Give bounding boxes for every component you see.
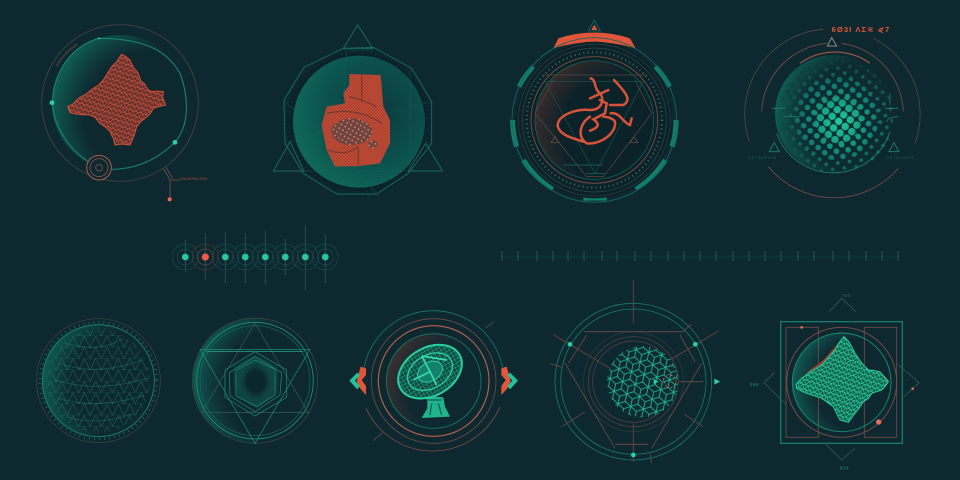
- callout line and dot: [163, 167, 179, 201]
- globe glow: [42, 325, 154, 437]
- panel: row of signal dots: [172, 225, 338, 290]
- left glyph label: ESTSUPLTE: [748, 156, 777, 160]
- wireframe terrain: [68, 54, 166, 145]
- rings: [36, 319, 160, 443]
- small dial: [87, 155, 111, 180]
- panel: rhombus sphere target: [550, 280, 720, 463]
- hexagon core: [233, 355, 278, 408]
- right glyph label: SETSTUEIS: [887, 156, 914, 160]
- triangle lattice: [46, 329, 150, 432]
- outer ring: [42, 25, 198, 181]
- diamond pointers: [764, 298, 919, 460]
- concentric rings: [512, 38, 677, 202]
- glyph header: 6Ø3I ΛΣ⋜ ⋞7: [832, 25, 890, 34]
- red point cluster: [663, 374, 677, 387]
- top triangle marker: [588, 20, 600, 31]
- creature squiggle: [558, 78, 632, 143]
- bracket lines: [550, 280, 719, 463]
- green dots: [182, 254, 329, 260]
- green wireframe terrain: [796, 337, 889, 422]
- triangle markers: [769, 38, 899, 152]
- latitude lines: [55, 338, 147, 421]
- teal inner ring with glow: [52, 35, 188, 171]
- red dot: [202, 253, 209, 261]
- hexagram lines: [200, 323, 310, 443]
- panel: organ sphere in polygon frame: [273, 25, 443, 194]
- right chevrons: [501, 367, 518, 395]
- vertical signal lines: [185, 225, 325, 290]
- rings: [787, 327, 897, 437]
- inner triangles: [535, 75, 652, 177]
- teal markers: [50, 37, 177, 145]
- sigil disc: [193, 319, 317, 443]
- dial rings: [363, 311, 503, 451]
- teal markers: [568, 342, 720, 457]
- rhombus sphere: [607, 346, 678, 417]
- concentric rings: [172, 244, 338, 270]
- dish antenna: [389, 334, 471, 418]
- panel: green terrain in square frame: [750, 293, 919, 472]
- left label: 568: [750, 382, 759, 388]
- red dots: [800, 326, 914, 425]
- teal arc segments: [513, 67, 676, 198]
- outer rings: [555, 303, 712, 460]
- panel: radar dish: [349, 311, 518, 451]
- top label: 750: [841, 293, 851, 299]
- arc label stroke: [57, 44, 77, 66]
- panel: creature dial: [512, 20, 677, 202]
- sigil rings: [192, 318, 318, 443]
- organ model: [322, 74, 390, 167]
- ruler axis: [501, 256, 899, 258]
- bottom label: 834: [840, 466, 849, 472]
- red top arc: [553, 32, 636, 48]
- polygon frame and triangles: [273, 25, 443, 194]
- left chevrons: [349, 367, 366, 395]
- ruler timeline: [501, 251, 899, 261]
- panel: hexagram sigil: [192, 318, 318, 443]
- sphere with gear edge: [288, 51, 430, 192]
- teal square frame: [781, 322, 902, 443]
- red side brackets: [786, 327, 897, 437]
- panel: triangulated globe: [36, 319, 160, 443]
- concentric arcs: [745, 29, 920, 198]
- ruler ticks: [502, 251, 898, 261]
- callout label: UNKNOWN RDS: [180, 177, 208, 181]
- halftone globe: [775, 55, 894, 174]
- panel: red wireframe terrain gauge: [42, 25, 208, 201]
- panel: halftone sphere: [745, 25, 920, 198]
